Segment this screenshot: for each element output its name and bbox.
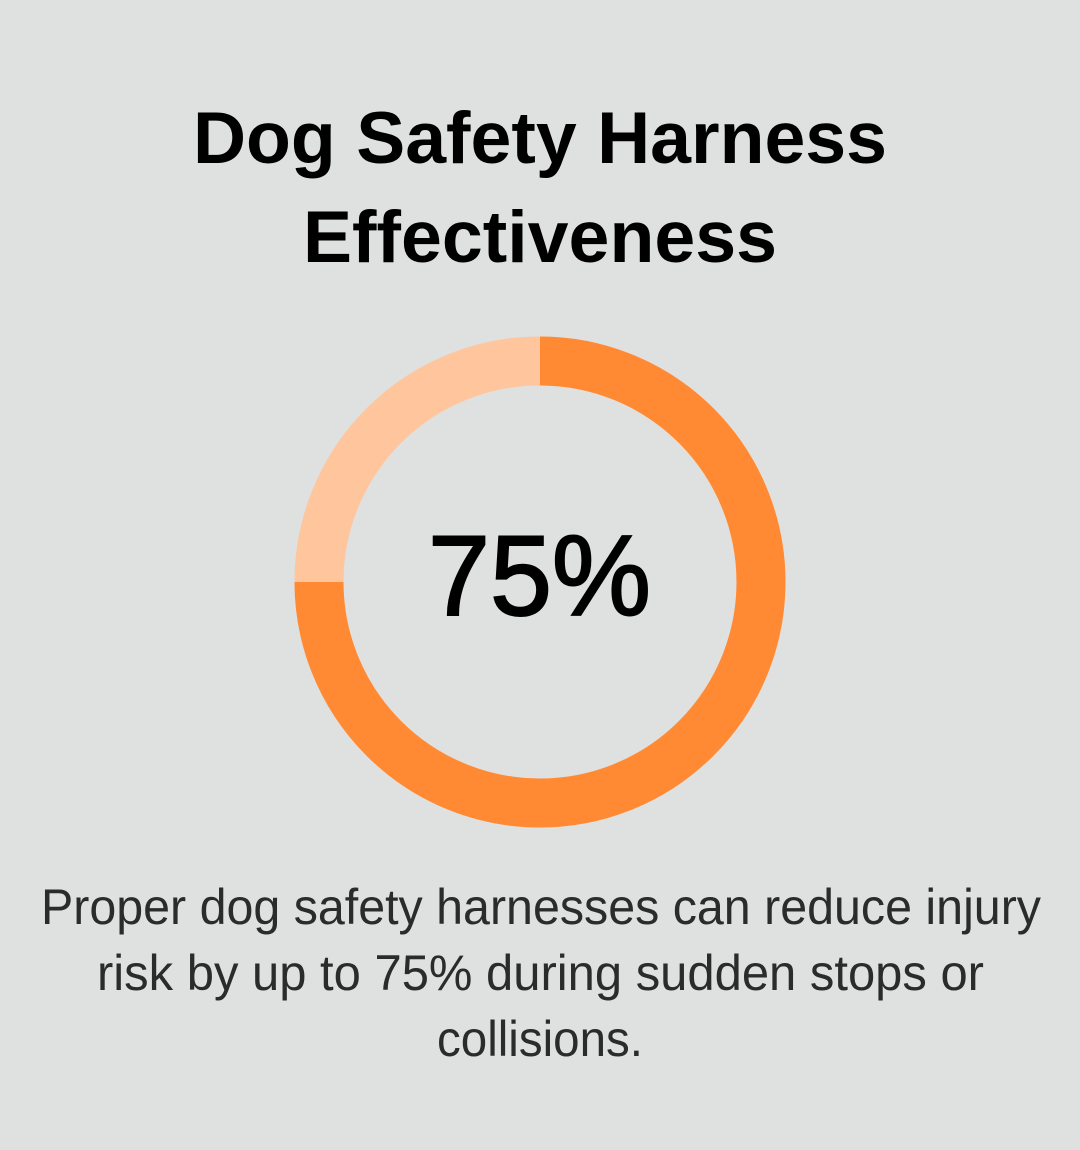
description text: Proper dog safety harnesses can reduce injury [41, 879, 1041, 935]
donut value: 75 percent [319, 361, 761, 803]
description text: risk by up to 75% during sudden stops or [97, 945, 984, 1001]
donut chart: 75 percent [319, 361, 761, 803]
title: Effectiveness [303, 197, 777, 278]
donut center value: 75% [428, 513, 651, 640]
donut remainder: 25 percent [319, 361, 761, 803]
title: Dog Safety Harness [193, 98, 887, 179]
description text [41, 879, 1041, 1067]
description text: collisions. [437, 1011, 643, 1067]
title [193, 98, 887, 278]
